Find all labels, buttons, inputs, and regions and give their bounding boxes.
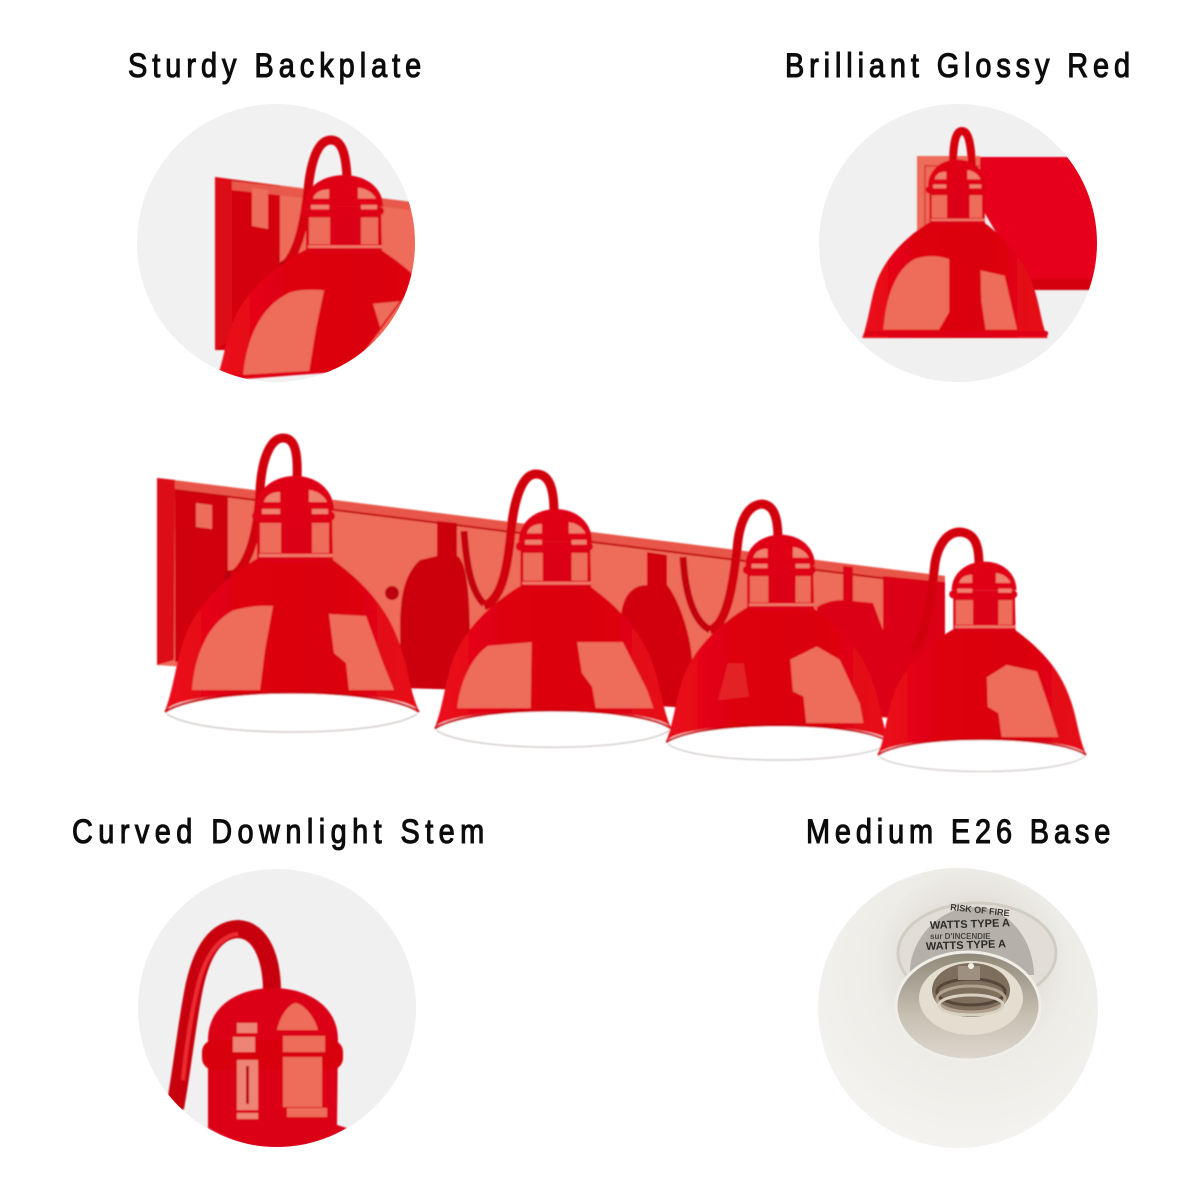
bolt — [385, 586, 399, 600]
arched stem — [953, 131, 972, 166]
backplate frame top edge — [157, 478, 945, 586]
lamp shade close-up — [218, 174, 412, 380]
bolt on backplate — [278, 260, 286, 267]
socket back collar — [898, 903, 1056, 1003]
panel: brilliant glossy red detail circle — [819, 104, 1100, 382]
title: Sturdy Backplate: Sturdy Backplate — [128, 46, 421, 85]
lamp 4 — [878, 562, 1086, 772]
backplate close-up — [215, 177, 420, 350]
panel: sturdy backplate detail circle — [137, 104, 415, 382]
backplate red section — [979, 156, 1097, 280]
curved stem — [175, 929, 272, 1108]
title: Curved Downlight Stem: Curved Downlight Stem — [72, 812, 484, 851]
title: Brilliant Glossy Red: Brilliant Glossy Red — [785, 46, 1130, 85]
panel: curved downlight stem detail circle — [138, 869, 416, 1148]
lamp cap dome and collar — [202, 988, 347, 1148]
reflection: second lamp — [400, 521, 470, 690]
socket label band: sur D'INCENDIE — [930, 932, 991, 941]
socket label band: RISK OF FIRE — [950, 902, 1010, 918]
ceramic socket — [919, 961, 1023, 1035]
left dark reflection — [175, 490, 228, 662]
socket cup — [896, 952, 1040, 1060]
lamp 3 — [666, 535, 890, 760]
lamp shade — [862, 159, 1048, 338]
panel: medium E26 base detail circle — [818, 868, 1098, 1148]
title: Medium E26 Base: Medium E26 Base — [806, 812, 1110, 851]
lamp 2 — [435, 509, 671, 747]
lamp stems — [232, 438, 979, 650]
lamp 1 — [165, 476, 419, 732]
socket label band — [910, 902, 1034, 975]
backplate — [157, 478, 945, 722]
socket label band: WATTS TYPE A — [926, 938, 1006, 953]
reflection: third lamp — [621, 552, 692, 708]
lamp stem close-up — [287, 140, 347, 263]
reflection: fourth lamp and right section — [817, 566, 945, 722]
bracket — [224, 570, 238, 584]
socket label band: WATTS TYPE A — [930, 917, 1010, 932]
backplate lower edge — [1030, 279, 1100, 290]
backplate glossy section — [917, 156, 980, 235]
left frame strip — [157, 478, 175, 665]
main product: four-light red vanity fixture — [157, 438, 1086, 772]
